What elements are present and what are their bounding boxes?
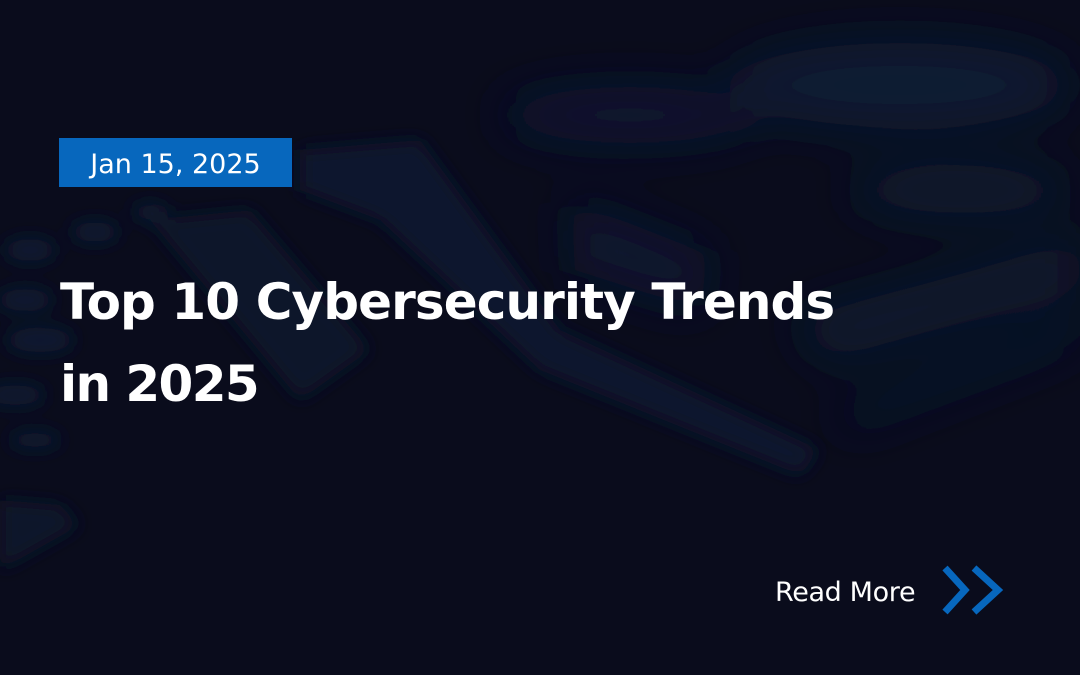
icon: double chevron arrow [942,565,1004,615]
title: Top 10 Cybersecurity Trends [60,273,834,331]
title: in 2025 [60,355,258,413]
date text: Jan 15, 2025 [90,149,261,180]
read more label: Read More [775,577,915,608]
title [60,273,834,413]
date badge [59,138,292,187]
